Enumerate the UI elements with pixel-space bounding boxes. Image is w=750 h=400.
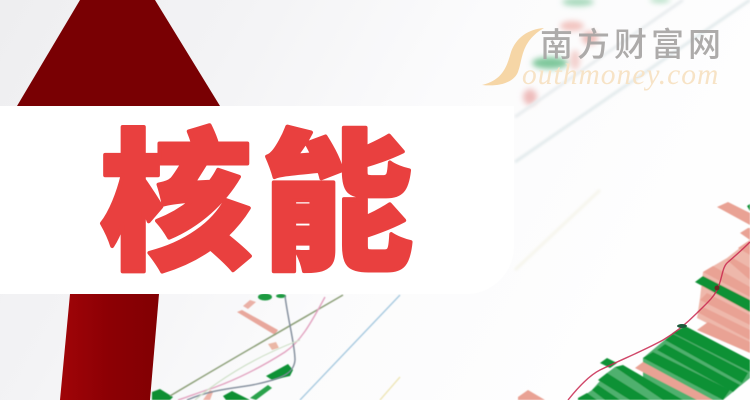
logo url: outhmoney.com <box>522 59 719 91</box>
right chart candles <box>518 202 750 400</box>
lower chart lines <box>170 295 400 400</box>
logo swoosh <box>482 28 544 85</box>
watermark logo <box>482 18 725 91</box>
white title panel <box>0 106 514 294</box>
green underlay <box>643 326 750 400</box>
right chart moving average line <box>568 242 750 400</box>
blurred background chart <box>523 0 670 105</box>
logo chinese name: 南方财富网 <box>540 18 725 66</box>
red arrow <box>17 0 220 400</box>
salmon underlay <box>697 240 750 345</box>
title: 核能 <box>100 81 422 301</box>
lower chart candles <box>152 294 293 400</box>
diagonal chart lines <box>515 0 750 270</box>
